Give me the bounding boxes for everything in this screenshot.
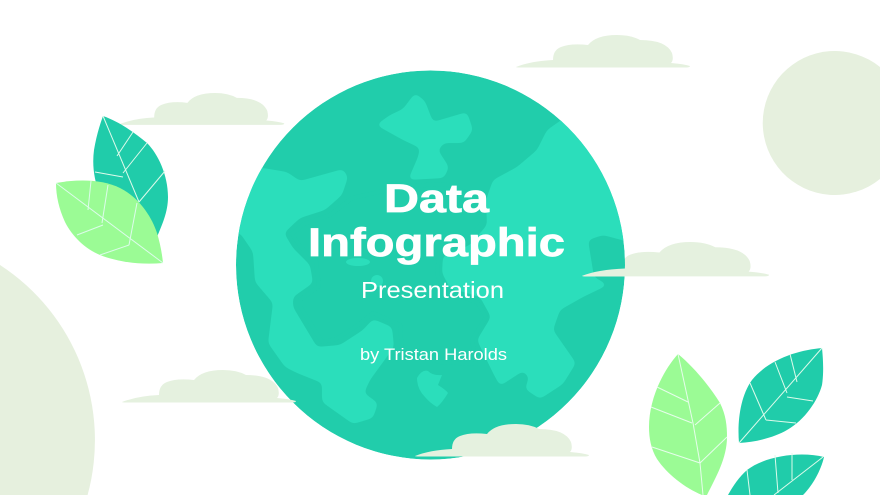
background circle: bottom left xyxy=(0,265,95,495)
cloud: top xyxy=(516,35,690,68)
leaf: light green xyxy=(649,354,727,495)
continent: right land xyxy=(442,120,624,398)
title line 1: Data xyxy=(384,177,490,221)
leaf: teal upper xyxy=(739,348,823,443)
leaf: light green front xyxy=(56,180,163,264)
globe central sea xyxy=(292,184,486,364)
author: by Tristan Harolds xyxy=(360,346,507,364)
cloud: right body behind globe xyxy=(582,242,769,276)
cloud: lower left xyxy=(122,370,296,402)
leaf cluster: bottom right xyxy=(649,348,824,495)
continent: small center patch xyxy=(346,258,370,266)
leaf cluster: left xyxy=(56,116,168,264)
title line 2: Infographic xyxy=(308,221,565,265)
globe continents xyxy=(238,95,624,423)
leaf: teal lower xyxy=(728,453,824,495)
globe small patches xyxy=(346,258,448,407)
continent: small south island xyxy=(417,371,448,407)
leaf: dark teal back xyxy=(93,116,168,237)
globe xyxy=(236,70,625,460)
title xyxy=(308,177,565,265)
continent: top island xyxy=(376,93,473,180)
continent: dot xyxy=(371,275,383,287)
continent: left land xyxy=(238,168,394,423)
cloud: upper left xyxy=(119,93,284,125)
subtitle: Presentation xyxy=(361,277,504,303)
background circle: top right xyxy=(763,51,880,195)
cloud: bottom xyxy=(415,424,589,456)
cloud: right base tip over globe xyxy=(582,268,625,276)
globe ocean xyxy=(236,70,625,460)
